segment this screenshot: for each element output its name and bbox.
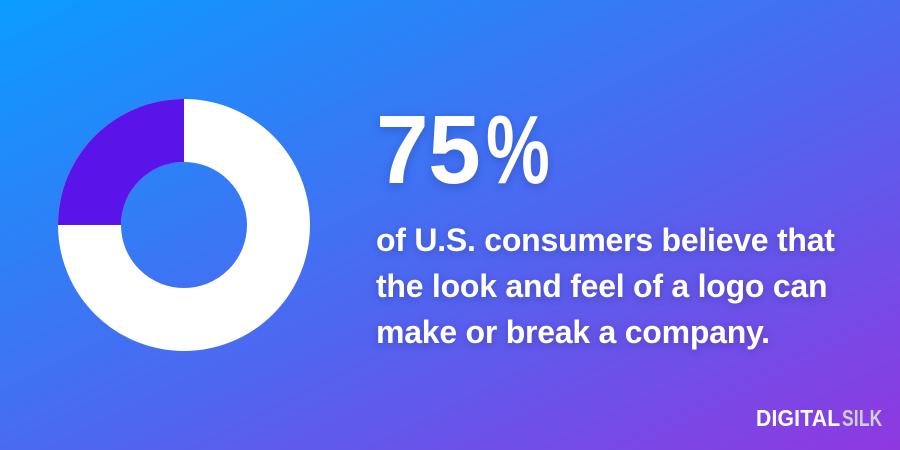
logo: Digital Silk: SILK: [842, 405, 882, 431]
text block: description: [375, 222, 835, 352]
heading: 75% statistic: [376, 95, 551, 204]
donut chart: 75%: [58, 99, 310, 351]
heading: 75% statistic: 75: [376, 95, 480, 204]
heading: 75% statistic: %: [486, 95, 550, 204]
logo: Digital Silk: DIGITAL: [756, 405, 840, 431]
text block: description: the look and feel of a logo can: [376, 268, 827, 304]
text block: description: of U.S. consumers believe that: [376, 222, 835, 258]
logo: Digital Silk: [756, 405, 882, 431]
text block: description: make or break a company.: [376, 314, 770, 350]
